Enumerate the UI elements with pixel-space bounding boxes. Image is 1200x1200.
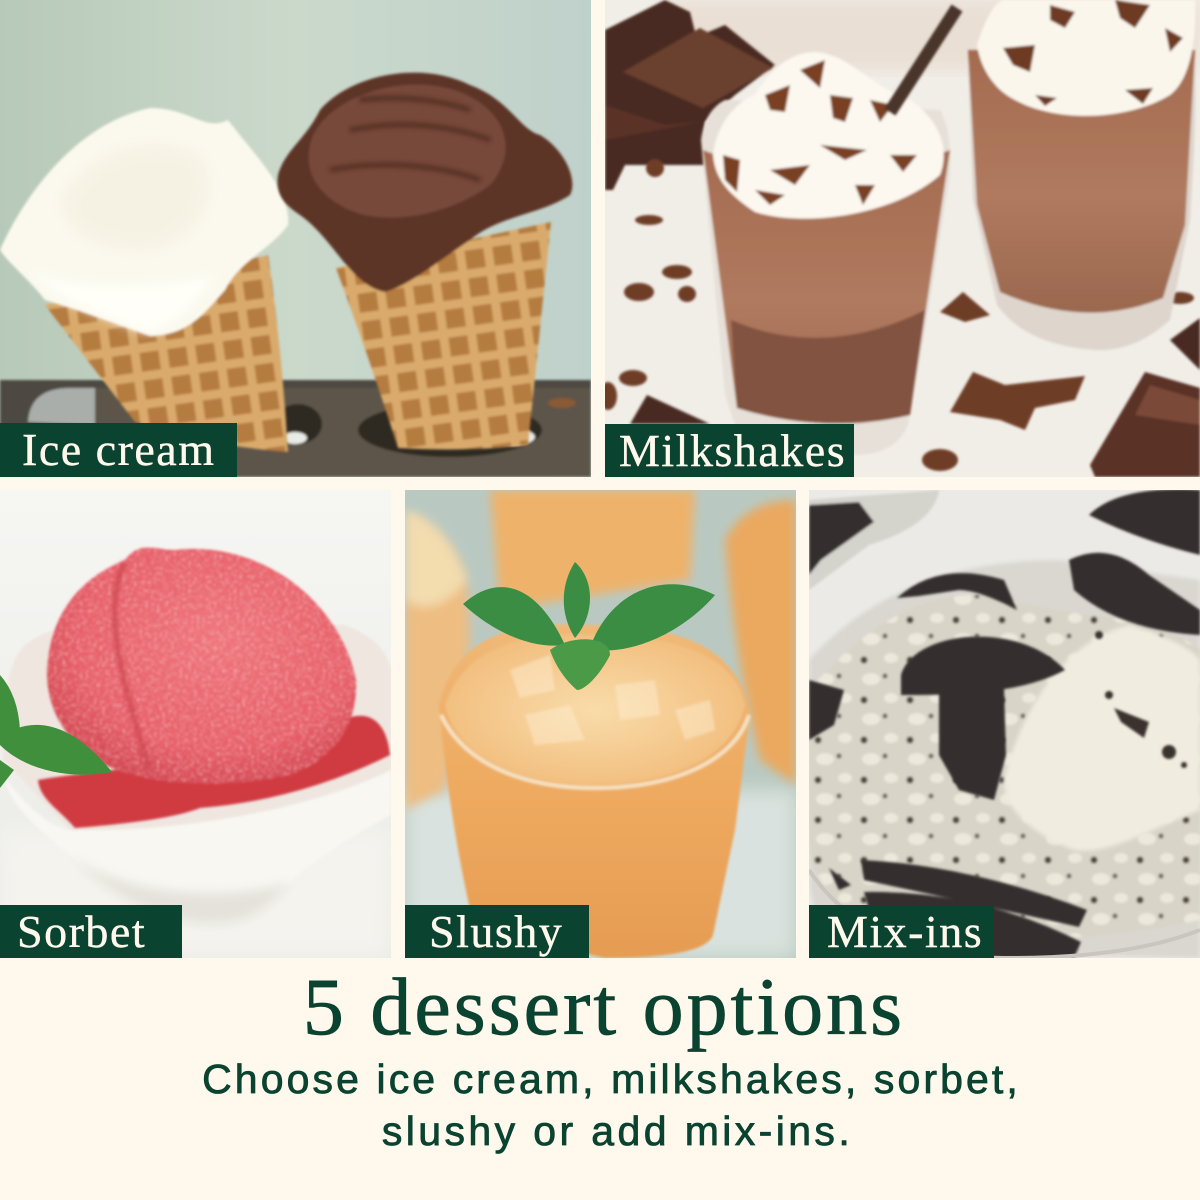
chocolate bar lower right (1090, 318, 1200, 477)
icon: white bowl (3, 625, 391, 924)
panel: slushy photo (405, 490, 796, 958)
icon: vanilla cone (0, 108, 288, 452)
panel: sorbet photo (0, 490, 391, 958)
title: 5 dessert options (303, 961, 905, 1052)
label: sorbet: Sorbet (17, 906, 146, 957)
chocolate piece lower left (630, 395, 710, 424)
icon: sorbet scoop (38, 548, 390, 828)
cookie crumbs (1095, 631, 1187, 768)
icon: slushy glass (439, 624, 750, 958)
label: milkshakes: Milkshakes (619, 425, 846, 476)
white scoop (1004, 625, 1200, 851)
panel: milkshakes photo (605, 0, 1200, 477)
icon: straw (890, 8, 957, 112)
label: ice cream: Ice cream (22, 424, 216, 475)
subtitle: Choose ice cream, milkshakes, sorbet, (202, 1056, 1021, 1102)
subtitle (202, 1056, 1021, 1154)
icon: rear milkshake (968, 0, 1195, 350)
label: mix-ins: Mix-ins (827, 906, 983, 957)
background glasses (405, 490, 796, 810)
chocolate bars top left (605, 0, 775, 190)
panel: ice cream photo (0, 0, 591, 477)
panel: mix-ins photo (809, 490, 1200, 958)
icon: front milkshake (701, 52, 950, 455)
ice cream mass (809, 595, 1200, 940)
label: sorbet (0, 905, 182, 958)
icon: mint leaf (0, 675, 112, 788)
icon: chocolate cone (277, 73, 572, 449)
chocolate flakes (599, 159, 1194, 471)
icon: mint sprig (463, 562, 715, 690)
oreo cookies (809, 489, 1200, 958)
subtitle: slushy or add mix-ins. (382, 1108, 853, 1154)
label: slushy: Slushy (429, 906, 563, 957)
